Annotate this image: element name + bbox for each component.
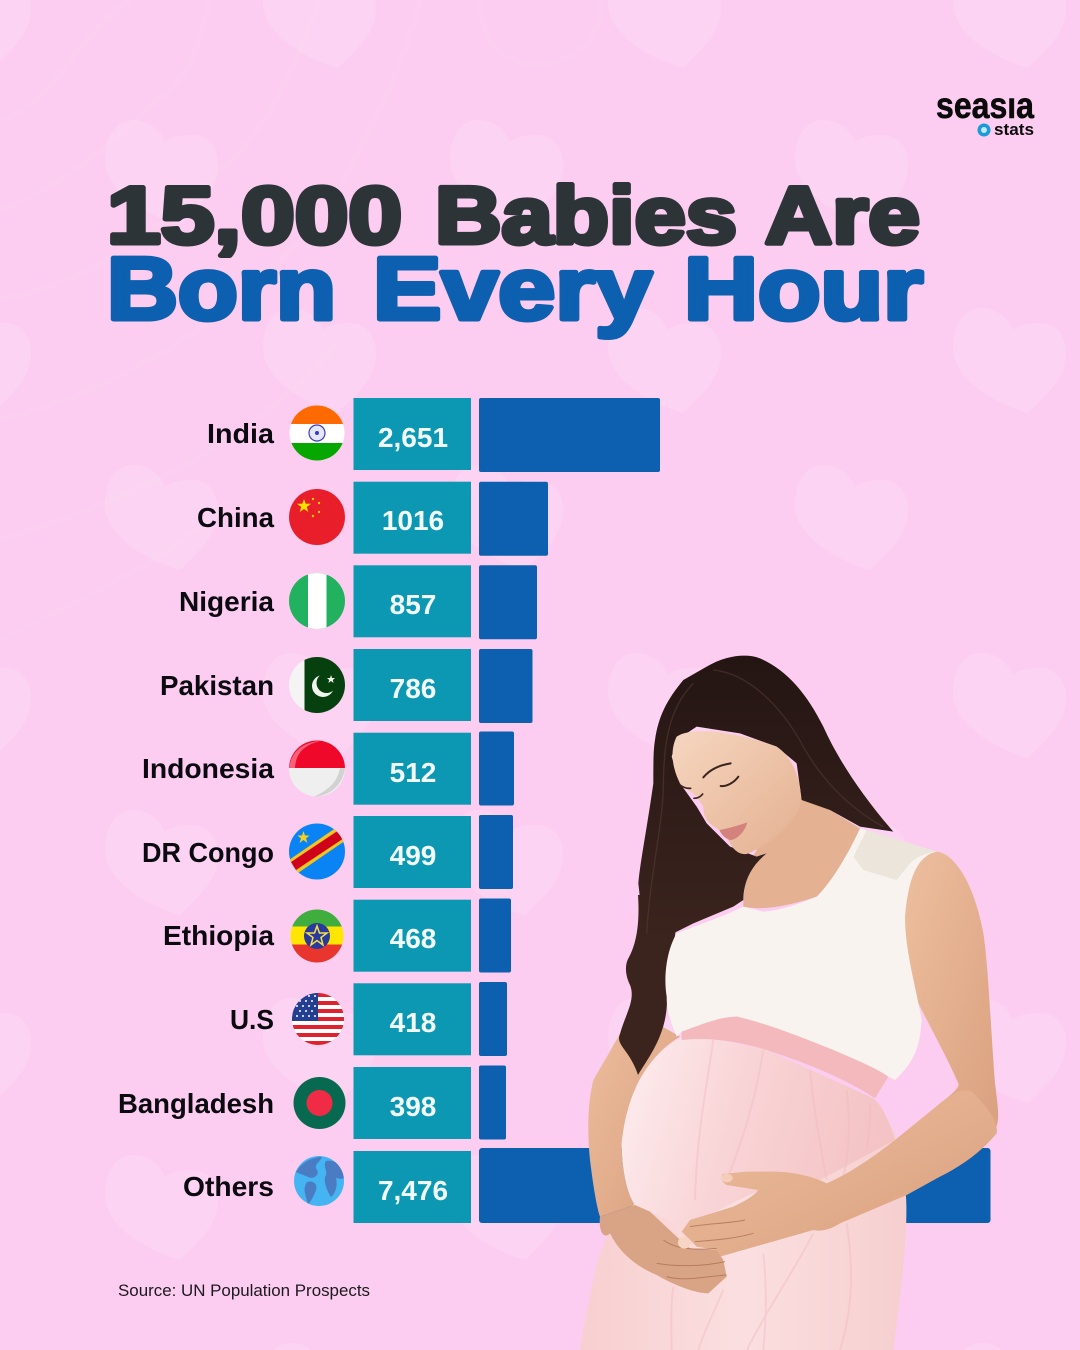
- left arm and skirt: [580, 1000, 906, 1350]
- top and upper arm: [665, 828, 998, 1160]
- row: U.S: 418: [390, 1007, 436, 1038]
- row: India: [207, 398, 660, 472]
- lower hair: [619, 895, 680, 1075]
- logo: [936, 98, 1034, 136]
- row: Others: [183, 1148, 990, 1223]
- row: Ethiopia: [163, 898, 511, 972]
- row: Bangladesh: Bangladesh: [118, 1088, 274, 1119]
- title: Babies: [435, 171, 737, 261]
- row: India: 2,651: [378, 422, 448, 453]
- row: Ethiopia: 468: [390, 923, 436, 954]
- row: China: China: [197, 502, 274, 533]
- eyes, brows and lips: [680, 763, 738, 798]
- title: Every: [373, 239, 652, 338]
- hair strands: [647, 670, 883, 933]
- row: DR Congo: DR Congo: [142, 837, 274, 868]
- neck: [743, 793, 860, 908]
- hair: [637, 656, 893, 950]
- logo: stats: [994, 120, 1034, 139]
- title: [107, 171, 923, 338]
- row: U.S: [230, 982, 507, 1056]
- row: Ethiopia: Ethiopia: [163, 920, 274, 951]
- row: Bangladesh: [118, 1066, 506, 1140]
- dress and hands: [600, 1017, 997, 1350]
- row: Nigeria: [179, 565, 537, 639]
- lace shoulder: [853, 830, 937, 880]
- row: Pakistan: 786: [390, 673, 436, 704]
- source note: Source: UN Population Prospects: [118, 1281, 370, 1300]
- bar chart: [118, 398, 990, 1223]
- head: [637, 656, 937, 950]
- row: China: [197, 482, 548, 556]
- row: DR Congo: [142, 815, 513, 889]
- row: India: India: [207, 418, 274, 449]
- title: Born: [107, 239, 336, 338]
- title: 15,000: [107, 171, 402, 261]
- row: China: 1016: [382, 505, 444, 536]
- row: Pakistan: Pakistan: [160, 670, 274, 701]
- row: U.S: U.S: [230, 1004, 274, 1035]
- row: Nigeria: 857: [390, 589, 436, 620]
- row: Others: 7,476: [378, 1175, 448, 1206]
- logo: seasia: [936, 85, 1034, 126]
- row: Indonesia: 512: [390, 757, 436, 788]
- title: Hour: [684, 239, 923, 338]
- illustration: pregnant woman: [580, 656, 998, 1350]
- title: Are: [765, 171, 920, 261]
- row: Indonesia: [142, 732, 514, 806]
- row: DR Congo: 499: [390, 840, 436, 871]
- row: Nigeria: Nigeria: [179, 586, 274, 617]
- row: Bangladesh: 398: [390, 1091, 436, 1122]
- row: Pakistan: [160, 649, 532, 723]
- face: [673, 731, 801, 854]
- row: Indonesia: Indonesia: [142, 753, 274, 784]
- row: Others: Others: [183, 1171, 274, 1202]
